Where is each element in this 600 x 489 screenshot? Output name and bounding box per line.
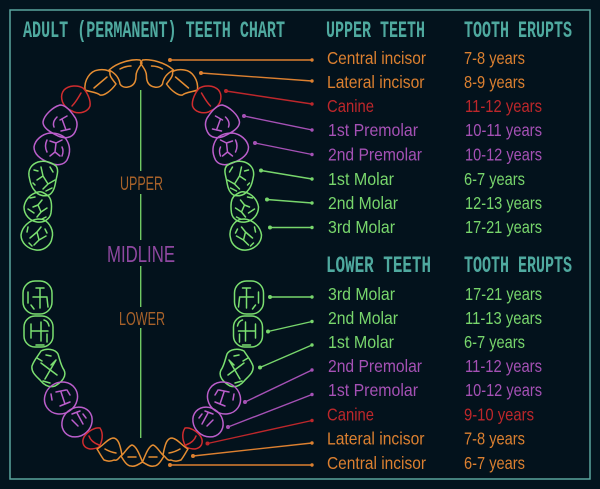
tooth: upper left 1st premolar bbox=[43, 105, 77, 138]
lower teeth: left side bbox=[23, 281, 142, 466]
tooth: lower right 1st molar bbox=[220, 349, 253, 387]
tooth: lower left 2nd premolar bbox=[38, 376, 84, 420]
list: upper teeth names bbox=[327, 48, 426, 237]
tooth: lower left 1st molar bbox=[32, 349, 65, 387]
heading: lower teeth: LOWER TEETH bbox=[326, 253, 431, 279]
tooth: upper right central incisor bbox=[140, 60, 174, 87]
list: lower eruption ages: 7-8 years bbox=[464, 428, 525, 448]
tooth: lower left 1st premolar bbox=[56, 401, 98, 443]
tooth: lower right central incisor bbox=[142, 445, 164, 466]
arrow: lower 2nd premolar bbox=[244, 369, 313, 403]
tooth: upper right 3rd molar bbox=[230, 219, 262, 250]
arrow: lower 1st molar bbox=[259, 344, 313, 369]
tooth: upper right canine bbox=[192, 86, 221, 113]
list: upper teeth names: 2nd Premolar bbox=[328, 144, 422, 164]
tooth: upper left 2nd premolar bbox=[34, 133, 70, 165]
list: upper eruption ages: 17-21 years bbox=[465, 217, 542, 237]
list: upper eruption ages: 10-12 years bbox=[465, 144, 542, 164]
list: lower eruption ages: 10-12 years bbox=[465, 380, 542, 400]
arrow: upper lateral incisor bbox=[200, 72, 313, 82]
list: lower teeth names: Lateral incisor bbox=[327, 428, 425, 448]
list: upper eruption ages: 12-13 years bbox=[465, 193, 542, 213]
list: lower eruption ages: 11-12 years bbox=[465, 356, 542, 376]
list: upper eruption ages: 8-9 years bbox=[464, 72, 525, 92]
list: upper teeth names: 3rd Molar bbox=[328, 217, 395, 237]
tooth: lower right lateral incisor bbox=[163, 438, 188, 461]
tooth: upper right 1st molar bbox=[225, 161, 254, 196]
list: lower eruption ages: 17-21 years bbox=[465, 284, 542, 304]
leader arrows: lower teeth bbox=[169, 296, 313, 466]
tooth: lower left central incisor bbox=[121, 445, 142, 466]
upper teeth: right side bbox=[140, 60, 262, 250]
list: upper teeth names: 1st Premolar bbox=[328, 120, 418, 140]
arrow: lower 1st premolar bbox=[227, 394, 313, 428]
list: upper eruption ages bbox=[464, 48, 542, 237]
list: lower eruption ages: 11-13 years bbox=[465, 308, 542, 328]
arrow: upper canine bbox=[225, 90, 313, 105]
tooth: upper right lateral incisor bbox=[166, 70, 198, 95]
tooth: lower left lateral incisor bbox=[97, 438, 122, 461]
lower teeth: right side bbox=[142, 281, 264, 466]
leader arrows: upper teeth bbox=[169, 59, 313, 229]
tooth: lower right 2nd molar bbox=[234, 316, 262, 347]
tooth: lower right 1st premolar bbox=[187, 401, 229, 443]
tooth: upper left 3rd molar bbox=[21, 219, 53, 250]
label: upper: UPPER bbox=[120, 174, 163, 195]
list: lower teeth names: 2nd Molar bbox=[328, 308, 398, 328]
tooth: upper left 1st molar bbox=[29, 161, 58, 196]
list: lower teeth names: Central incisor bbox=[327, 453, 426, 473]
list: upper eruption ages: 11-12 years bbox=[465, 96, 542, 116]
tooth: lower left canine bbox=[83, 428, 102, 449]
list: upper eruption ages: 6-7 years bbox=[464, 169, 525, 189]
tooth: upper right 1st premolar bbox=[205, 105, 240, 138]
list: lower eruption ages: 6-7 years bbox=[464, 332, 525, 352]
list: lower teeth names: 3rd Molar bbox=[328, 284, 395, 304]
list: lower eruption ages bbox=[464, 284, 542, 473]
arrow: lower 3rd molar bbox=[269, 296, 313, 298]
list: lower teeth names: 1st Molar bbox=[328, 332, 394, 352]
tooth: lower left 3rd molar bbox=[23, 281, 52, 314]
arrow: lower lateral incisor bbox=[192, 442, 313, 457]
arrow: upper 2nd premolar bbox=[254, 142, 313, 156]
tooth: lower left 2nd molar bbox=[24, 316, 53, 347]
arrow: upper 1st molar bbox=[260, 169, 313, 180]
heading: upper teeth: UPPER TEETH bbox=[326, 18, 425, 44]
tooth: upper right 2nd premolar bbox=[213, 133, 248, 165]
arrow: upper 2nd molar bbox=[266, 198, 313, 204]
list: upper eruption ages: 7-8 years bbox=[464, 48, 525, 68]
list: lower teeth names: 1st Premolar bbox=[328, 380, 418, 400]
tooth: lower right 3rd molar bbox=[234, 281, 264, 314]
label: midline: MIDLINE bbox=[107, 241, 175, 267]
tooth: lower right 2nd premolar bbox=[201, 376, 247, 420]
arrow: lower canine bbox=[206, 420, 313, 445]
list: upper eruption ages: 10-11 years bbox=[465, 120, 542, 140]
tooth: upper left 2nd molar bbox=[24, 192, 52, 222]
tooth: upper left central incisor bbox=[109, 60, 142, 87]
list: upper teeth names: Canine bbox=[327, 96, 374, 116]
list: lower eruption ages: 6-7 years bbox=[464, 453, 525, 473]
list: lower teeth names bbox=[327, 284, 426, 473]
arrow: lower 2nd molar bbox=[267, 320, 313, 333]
title: ADULT (PERMANENT) TEETH CHART bbox=[23, 18, 285, 44]
list: lower eruption ages: 9-10 years bbox=[464, 404, 534, 424]
upper teeth: left side bbox=[21, 60, 142, 250]
tooth: upper right 2nd molar bbox=[231, 192, 258, 222]
list: upper teeth names: 1st Molar bbox=[328, 169, 394, 189]
tooth: lower right canine bbox=[183, 428, 202, 449]
tooth: upper left lateral incisor bbox=[85, 70, 116, 95]
list: lower teeth names: Canine bbox=[327, 404, 374, 424]
midline: lower segments bbox=[140, 266, 142, 438]
arrow: lower central incisor bbox=[169, 464, 313, 466]
arrow: upper 1st premolar bbox=[243, 115, 313, 131]
list: upper teeth names: Lateral incisor bbox=[327, 72, 425, 92]
tooth: upper left canine bbox=[62, 86, 90, 113]
arrow: upper 3rd molar bbox=[269, 226, 313, 229]
list: upper teeth names: Central incisor bbox=[327, 48, 426, 68]
list: lower teeth names: 2nd Premolar bbox=[328, 356, 422, 376]
arrow: upper central incisor bbox=[169, 59, 313, 61]
label: lower: LOWER bbox=[119, 308, 165, 329]
midline: upper segments bbox=[140, 90, 142, 240]
list: upper teeth names: 2nd Molar bbox=[328, 193, 398, 213]
